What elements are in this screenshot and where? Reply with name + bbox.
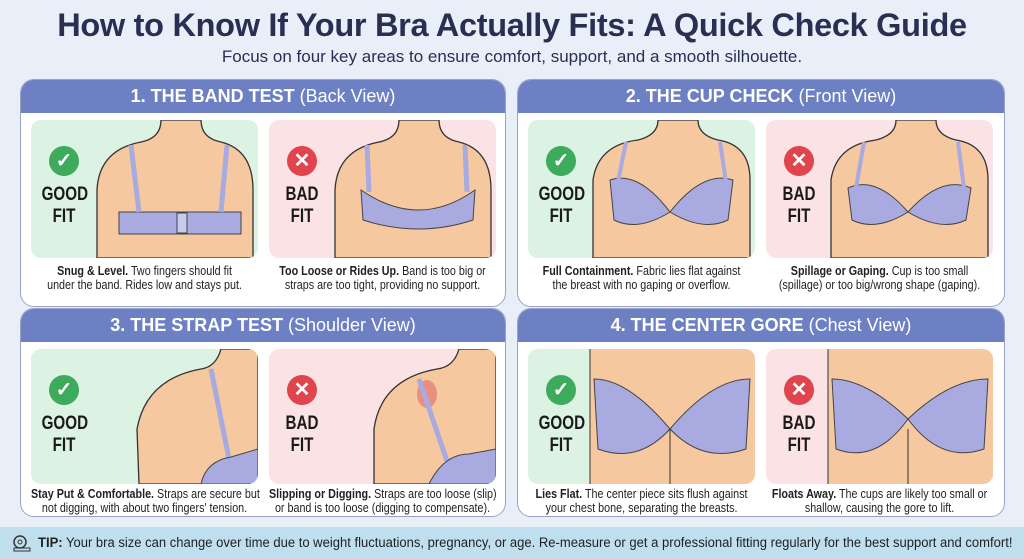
badge: bad fit: BAD — [783, 184, 815, 205]
badge: good fit — [539, 375, 585, 456]
badge: bad fit: BAD — [286, 413, 318, 434]
panel: center gore — [517, 308, 1005, 517]
panel header: 3. THE STRAP TEST (Shoulder View) — [110, 315, 416, 335]
caption good — [31, 487, 260, 515]
badge: bad fit — [286, 375, 318, 456]
panel header — [518, 309, 1004, 342]
badge: good fit: FIT — [53, 206, 75, 227]
caption bad — [269, 487, 497, 515]
badge: good fit: GOOD — [42, 184, 88, 205]
subtitle: Focus on four key areas to ensure comfort, support, and a smooth silhouette. — [222, 47, 802, 66]
caption bad: Slipping or Digging. Straps are too loose (slip) — [269, 487, 497, 501]
badge: bad fit: ✕ — [791, 379, 807, 401]
caption good — [536, 487, 748, 515]
badge: bad fit: BAD — [286, 184, 318, 205]
panel header — [21, 80, 505, 113]
badge: bad fit: ✕ — [294, 379, 310, 401]
badge: good fit — [539, 146, 585, 227]
caption good: Snug & Level. Two fingers should fit — [57, 264, 232, 278]
caption good: Full Containment. Fabric lies flat against — [543, 264, 740, 278]
badge: bad fit: ✕ — [791, 150, 807, 172]
badge: bad fit: FIT — [291, 206, 313, 227]
card: good band — [31, 120, 258, 258]
badge: bad fit: ✕ — [294, 150, 310, 172]
caption good: under the band. Rides low and stays put. — [47, 278, 242, 292]
badge: good fit: FIT — [550, 435, 572, 456]
panel header — [518, 80, 1004, 113]
caption bad — [779, 264, 980, 292]
caption bad: Spillage or Gaping. Cup is too small — [791, 264, 968, 278]
caption good: Stay Put & Comfortable. Straps are secure but — [31, 487, 260, 501]
caption good: not digging, with about two fingers' tension. — [42, 501, 247, 515]
panel header: 1. THE BAND TEST (Back View) — [131, 86, 395, 106]
caption bad: straps are too tight, providing no support. — [285, 278, 480, 292]
caption bad — [772, 487, 988, 515]
badge: good fit: ✓ — [56, 150, 72, 172]
icon: tape measure — [13, 535, 30, 552]
tip text: TIP: Your bra size can change over time due to weight fluctuations, pregnancy, or age. Re-measure or get a professional fitting regularly for the best support and comfort! — [38, 535, 1012, 550]
panel: band test — [20, 79, 506, 307]
caption bad: (spillage) or too big/wrong shape (gaping). — [779, 278, 980, 292]
caption good — [47, 264, 242, 292]
panel: strap test — [20, 308, 506, 517]
badge: bad fit — [783, 146, 815, 227]
caption bad: shallow, causing the gore to lift. — [805, 501, 954, 515]
badge: good fit — [42, 146, 88, 227]
caption bad: Floats Away. The cups are likely too small or — [772, 487, 987, 501]
badge: good fit: ✓ — [553, 150, 569, 172]
badge: good fit: GOOD — [42, 413, 88, 434]
title: How to Know If Your Bra Actually Fits: A Quick Check Guide — [57, 7, 967, 43]
panel header — [21, 309, 505, 342]
badge: good fit: ✓ — [553, 379, 569, 401]
caption good: your chest bone, separating the breasts. — [546, 501, 737, 515]
panel header: 4. THE CENTER GORE (Chest View) — [611, 315, 911, 335]
tip bar — [0, 527, 1024, 559]
badge: good fit: FIT — [53, 435, 75, 456]
badge: bad fit: FIT — [788, 435, 810, 456]
card: good gore — [528, 349, 755, 484]
caption good: Lies Flat. The center piece sits flush against — [536, 487, 747, 501]
badge: bad fit — [286, 146, 318, 227]
card: good cup — [528, 120, 755, 258]
card: bad band — [269, 120, 496, 258]
badge: good fit — [42, 375, 88, 456]
badge: good fit: FIT — [550, 206, 572, 227]
badge: bad fit: FIT — [291, 435, 313, 456]
badge: bad fit — [783, 375, 815, 456]
caption bad — [279, 264, 486, 292]
badge: good fit: ✓ — [56, 379, 72, 401]
caption good: the breast with no gaping or overflow. — [552, 278, 731, 292]
badge: bad fit: FIT — [788, 206, 810, 227]
caption good — [543, 264, 740, 292]
card: bad strap — [269, 349, 496, 484]
card: bad cup — [766, 120, 993, 258]
panel: cup check — [517, 79, 1005, 307]
badge: good fit: GOOD — [539, 184, 585, 205]
caption bad: Too Loose or Rides Up. Band is too big or — [279, 264, 486, 278]
caption bad: or band is too loose (digging to compensate). — [275, 501, 490, 515]
card: good strap — [31, 349, 258, 484]
badge: bad fit: BAD — [783, 413, 815, 434]
panel header: 2. THE CUP CHECK (Front View) — [626, 86, 896, 106]
badge: good fit: GOOD — [539, 413, 585, 434]
card: bad gore — [766, 349, 993, 484]
